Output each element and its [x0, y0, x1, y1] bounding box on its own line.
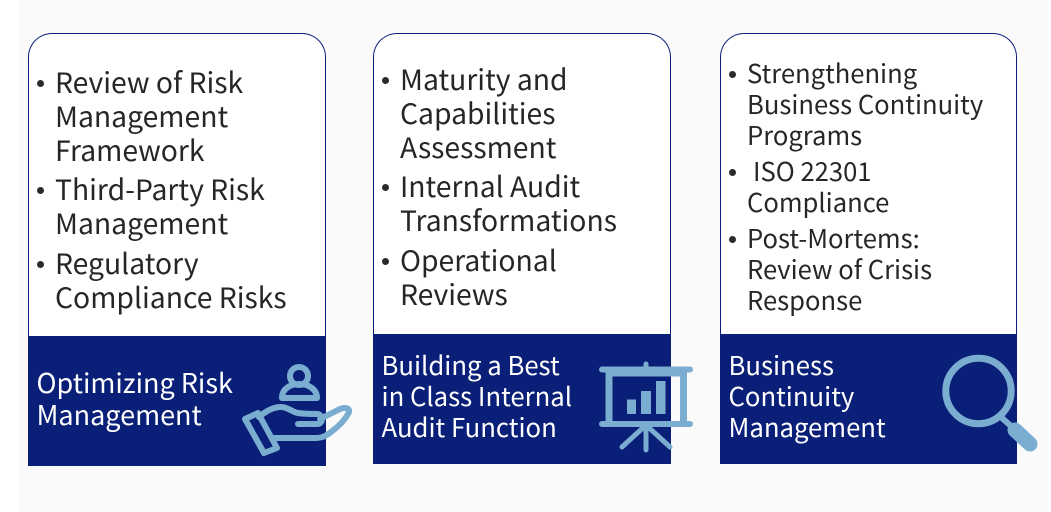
bullet list: Transformations: [400, 199, 617, 240]
bullet list: Compliance Risks: [55, 276, 287, 317]
bullet list: Post-Mortems:: [747, 219, 920, 256]
band heading: Audit Function: [382, 408, 557, 445]
panel: internal audit function: [373, 33, 693, 464]
band heading: Continuity: [728, 377, 854, 414]
bullet list: [382, 58, 617, 314]
bullet list: Operational: [400, 239, 557, 280]
bullet list: Programs: [747, 116, 862, 153]
card body: [373, 33, 671, 335]
title band: [373, 334, 671, 464]
bullet list: Framework: [55, 129, 204, 170]
band heading: [36, 362, 233, 433]
band heading: Management: [728, 408, 886, 445]
band heading: [382, 346, 572, 445]
band heading: [728, 346, 886, 445]
bullet list: Assessment: [400, 126, 556, 167]
bullet list: Reviews: [400, 273, 508, 314]
title band: [720, 334, 1017, 464]
bullet list: Management: [55, 95, 228, 136]
bullet list: Maturity and: [400, 58, 568, 99]
bullet list: Management: [55, 202, 228, 243]
band heading: Business: [728, 346, 834, 383]
icon: magnifying glass: [942, 354, 1038, 452]
band heading: Management: [36, 394, 202, 433]
bullet list: [37, 61, 287, 317]
bullet list: Strengthening: [747, 54, 917, 91]
icon: presentation board: [599, 362, 693, 452]
band heading: in Class Internal: [382, 377, 572, 414]
bullet list: [729, 54, 983, 318]
panel: business continuity management: [720, 33, 1038, 464]
card body: [28, 33, 326, 337]
title band: [28, 336, 326, 466]
bullet list: Response: [747, 281, 862, 318]
band heading: Optimizing Risk: [36, 362, 233, 401]
icon: hand holding person: [242, 364, 352, 456]
bullet list: Review of Crisis: [747, 250, 932, 287]
panel: optimizing risk management: [28, 33, 352, 466]
band heading: Building a Best: [382, 346, 560, 383]
bullet list: Third-Party Risk: [55, 168, 265, 209]
bullet list: Compliance: [747, 183, 889, 220]
bullet list: ISO 22301: [753, 152, 872, 189]
bullet list: Capabilities: [400, 92, 555, 133]
bullet list: Regulatory: [55, 242, 199, 283]
bullet list: Review of Risk: [55, 61, 243, 102]
bullet list: Internal Audit: [400, 165, 580, 206]
card body: [720, 33, 1017, 335]
bullet list: Business Continuity: [747, 85, 983, 122]
